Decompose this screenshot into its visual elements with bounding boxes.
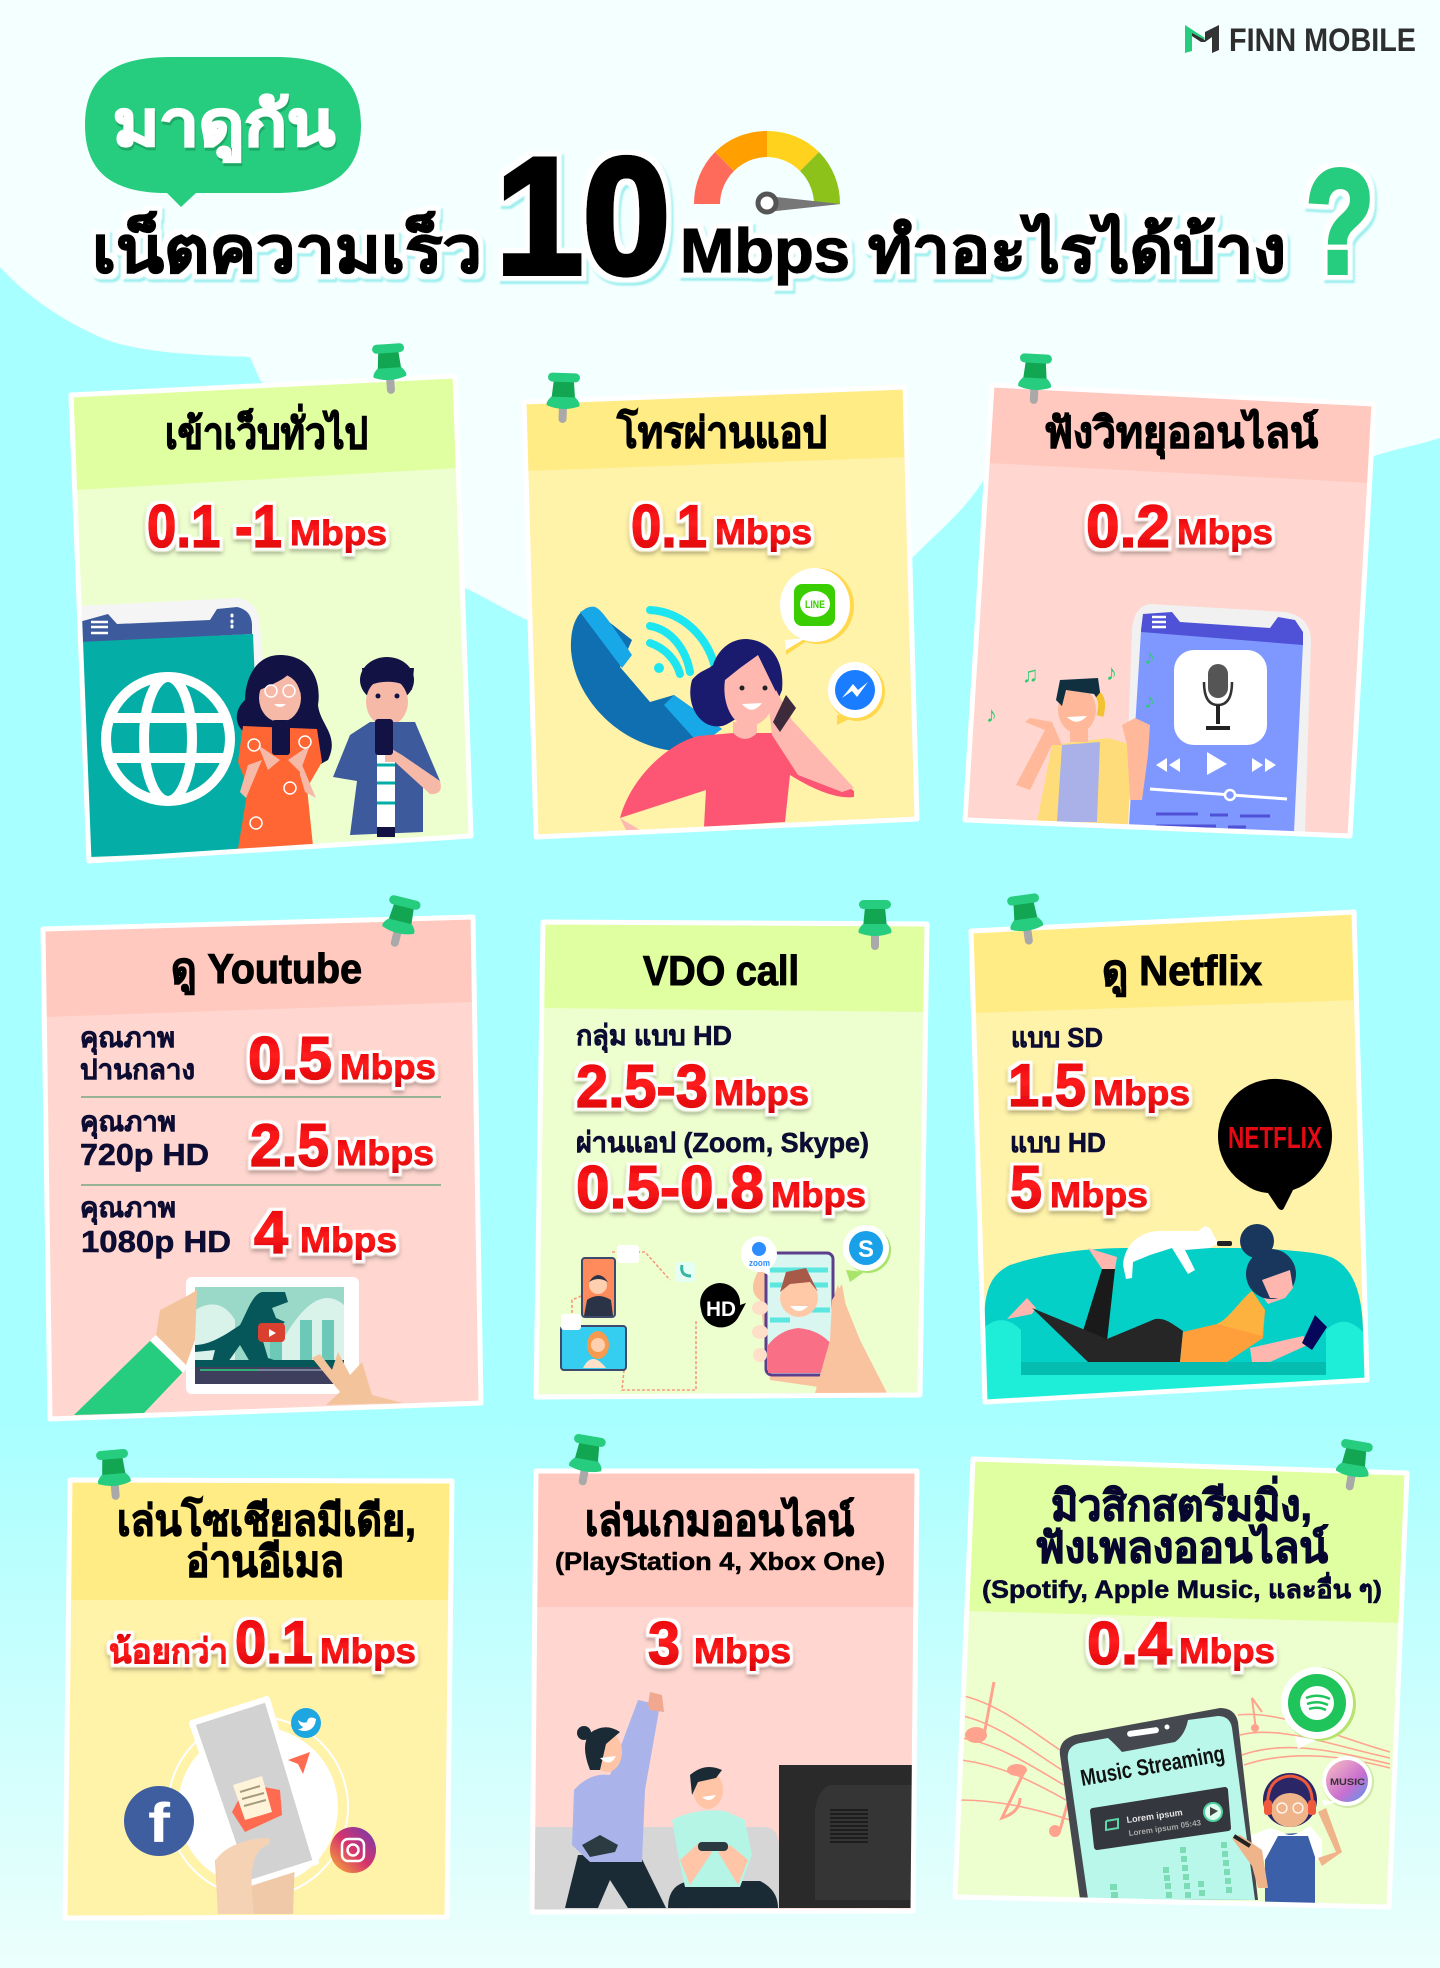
title: ทำอะไรได้บ้าง bbox=[868, 213, 1286, 286]
illustration: phone with social icons bbox=[124, 1699, 376, 1914]
row: medium quality: ปานกลาง bbox=[80, 1054, 195, 1085]
pin bbox=[1017, 353, 1053, 405]
panel: music streaming bbox=[955, 1438, 1407, 1907]
card border bbox=[524, 387, 917, 837]
pin bbox=[858, 900, 892, 950]
card border bbox=[71, 376, 471, 861]
illustration: woman calling with handset bbox=[571, 568, 885, 830]
card body bbox=[536, 922, 927, 1397]
card header band bbox=[535, 1471, 917, 1607]
title: 10 bbox=[496, 124, 670, 308]
speed value: Mbps bbox=[320, 1632, 416, 1671]
heading: ดู Netflix bbox=[1102, 947, 1263, 997]
card border bbox=[65, 1480, 452, 1918]
speed value: Mbps bbox=[1177, 513, 1273, 552]
card body bbox=[71, 376, 471, 861]
row: HD: Mbps bbox=[1050, 1176, 1148, 1215]
panel: youtube bbox=[43, 894, 481, 1419]
icon: speedometer gauge bbox=[694, 131, 841, 212]
speed value bbox=[109, 1609, 416, 1676]
panel: social media bbox=[65, 1449, 452, 1918]
heading: มิวสิกสตรีมมิ่ง, bbox=[1051, 1476, 1312, 1529]
heading: โทรผ่านแอป bbox=[616, 408, 827, 456]
speed value bbox=[1086, 493, 1273, 560]
netflix bubble bbox=[1218, 1079, 1332, 1210]
illustration: woman on couch with cat bbox=[984, 1224, 1366, 1401]
logo: FINN MOBILE: FINN MOBILE bbox=[1229, 22, 1416, 58]
illustration: video call phones: zoom bbox=[749, 1258, 770, 1268]
illustration: woman calling with handset: LINE bbox=[805, 599, 825, 611]
row: medium quality: 0.5 bbox=[248, 1025, 332, 1092]
row: group HD: 2.5-3 bbox=[576, 1053, 708, 1120]
card body bbox=[965, 385, 1374, 836]
speed value: 3 bbox=[648, 1610, 680, 1677]
heading: เล่นโซเชียลมีเดีย, bbox=[117, 1496, 416, 1544]
heading: อ่านอีเมล bbox=[186, 1538, 344, 1585]
background: pale top wave bbox=[0, 0, 1440, 631]
panel: online radio bbox=[965, 353, 1374, 836]
illustration: video call phones: HD bbox=[706, 1298, 736, 1321]
speed value bbox=[648, 1610, 791, 1677]
row: 1080p bbox=[80, 1192, 397, 1266]
card header band bbox=[71, 376, 458, 490]
heading: เข้าเว็บทั่วไป bbox=[165, 404, 368, 457]
row: via app: 0.5-0.8 bbox=[576, 1154, 764, 1221]
illustration: phone, music notes, girl: Music Streaming bbox=[1078, 1740, 1227, 1791]
illustration: video call phones: S bbox=[858, 1236, 874, 1263]
row: via app: ผ่านแอป (Zoom, Skype) bbox=[576, 1127, 869, 1158]
speed value: น้อยกว่า bbox=[109, 1633, 228, 1671]
panel: general web bbox=[71, 343, 471, 861]
row: group HD: Mbps bbox=[714, 1074, 809, 1113]
row: 720p: 2.5 bbox=[250, 1112, 329, 1179]
illustration: phone, music notes, girl: Lorem ipsum bbox=[1128, 1822, 1179, 1838]
title: Mbps bbox=[680, 217, 850, 286]
row: group HD: กลุ่ม แบบ HD bbox=[576, 1020, 732, 1053]
heading: (PlayStation 4, Xbox One) bbox=[555, 1548, 885, 1576]
row: 720p: Mbps bbox=[336, 1134, 434, 1173]
speech bubble: มาดูกัน bbox=[85, 57, 361, 207]
card border bbox=[536, 922, 927, 1397]
heading: เล่นเกมออนไลน์ bbox=[585, 1496, 854, 1544]
panel: video call bbox=[536, 900, 927, 1397]
row: 1080p: คุณภาพ bbox=[80, 1192, 176, 1225]
card header band bbox=[542, 922, 927, 1012]
card body bbox=[524, 387, 917, 837]
row: SD: Mbps bbox=[1093, 1074, 1190, 1113]
row: 720p: 720p HD bbox=[80, 1137, 209, 1172]
card border bbox=[965, 385, 1374, 836]
heading bbox=[117, 1496, 416, 1585]
row: SD bbox=[1008, 1022, 1190, 1119]
card border bbox=[955, 1459, 1407, 1907]
pin bbox=[1333, 1438, 1374, 1493]
card header band bbox=[68, 1480, 452, 1600]
card header band bbox=[43, 917, 475, 1017]
illustration: man listening and phone bbox=[986, 604, 1311, 832]
speed value: 0.4 bbox=[1087, 1610, 1173, 1677]
heading: (Spotify, Apple Music, และอื่น ๆ) bbox=[982, 1572, 1382, 1604]
pin bbox=[1006, 893, 1046, 947]
illustration: phone with social icons: f bbox=[148, 1791, 170, 1854]
row: 1080p: 1080p HD bbox=[81, 1224, 231, 1259]
heading bbox=[555, 1496, 885, 1576]
row: medium quality: Mbps bbox=[340, 1048, 436, 1087]
heading: VDO call bbox=[643, 947, 799, 994]
speed value bbox=[1087, 1610, 1275, 1677]
pin bbox=[566, 1433, 607, 1488]
panel: netflix bbox=[971, 893, 1367, 1402]
illustration: phone, music notes, girl bbox=[960, 1667, 1390, 1904]
row: SD: 1.5 bbox=[1008, 1052, 1086, 1119]
card body bbox=[955, 1459, 1407, 1907]
panel: voice call bbox=[524, 372, 917, 837]
question mark: ? bbox=[1306, 140, 1374, 303]
speed value: Mbps bbox=[715, 513, 812, 552]
pin bbox=[546, 372, 581, 424]
illustration: phone, music notes, girl: Lorem ipsum bbox=[1126, 1807, 1183, 1825]
illustration: man listening and phone: ♪ bbox=[986, 702, 997, 727]
row: 1080p: Mbps bbox=[300, 1221, 397, 1260]
speed value: 0.1 -1 bbox=[147, 493, 282, 560]
speed value: Mbps bbox=[694, 1632, 791, 1671]
card header band bbox=[967, 1459, 1407, 1623]
card body bbox=[971, 912, 1367, 1402]
row: medium quality: คุณภาพ bbox=[80, 1022, 175, 1055]
row: 720p: คุณภาพ bbox=[80, 1106, 176, 1139]
card body bbox=[532, 1471, 917, 1912]
title bbox=[92, 124, 1286, 308]
pin bbox=[378, 894, 422, 951]
title: เน็ตความเร็ว bbox=[92, 212, 482, 286]
netflix bubble: NETFLIX bbox=[1228, 1120, 1322, 1155]
illustration: video call phones bbox=[561, 1225, 891, 1393]
speed value: 0.1 bbox=[235, 1609, 313, 1676]
illustration: tablet video player bbox=[74, 1277, 403, 1415]
card body bbox=[43, 917, 481, 1419]
row: HD bbox=[1010, 1127, 1148, 1221]
pin bbox=[371, 343, 408, 395]
heading: ฟังวิทยุออนไลน์ bbox=[1044, 408, 1318, 459]
row: via app: Mbps bbox=[771, 1176, 866, 1215]
speed value: Mbps bbox=[290, 514, 387, 553]
illustration: man listening and phone: ♪ bbox=[1106, 660, 1117, 685]
illustration: gamers and TV bbox=[532, 1692, 913, 1910]
heading bbox=[982, 1476, 1382, 1604]
speed value: Mbps bbox=[1179, 1632, 1275, 1671]
row: HD: แบบ HD bbox=[1010, 1127, 1106, 1158]
card border bbox=[532, 1471, 917, 1912]
row: 720p bbox=[80, 1106, 434, 1179]
card header band bbox=[971, 912, 1357, 1013]
speech bubble: มาดูกัน: มาดูกัน bbox=[113, 90, 335, 162]
row: via app bbox=[576, 1127, 869, 1221]
illustration: phone with globe and two people bbox=[77, 598, 441, 858]
row: 1080p: 4 bbox=[254, 1199, 289, 1266]
speed value bbox=[631, 493, 812, 560]
card border bbox=[43, 917, 481, 1419]
card border bbox=[971, 912, 1367, 1402]
row: HD: 5 bbox=[1010, 1154, 1042, 1221]
row: medium quality bbox=[80, 1022, 436, 1092]
heading: ดู Youtube bbox=[171, 945, 362, 995]
speed value: 0.1 bbox=[631, 493, 707, 560]
speed value bbox=[147, 493, 387, 560]
illustration: man listening and phone: ♪ bbox=[1144, 644, 1155, 669]
card body bbox=[65, 1480, 452, 1918]
illustration: phone, music notes, girl: 05:43 bbox=[1180, 1818, 1202, 1830]
row: SD: แบบ SD bbox=[1011, 1022, 1103, 1053]
card header band bbox=[524, 387, 907, 471]
illustration: man listening and phone: ♫ bbox=[1022, 662, 1038, 687]
pin bbox=[95, 1449, 132, 1501]
speed value: 0.2 bbox=[1086, 493, 1170, 560]
illustration: man listening and phone: ♪ bbox=[1144, 688, 1155, 713]
card header band bbox=[988, 385, 1374, 483]
heading: ฟังเพลงออนไลน์ bbox=[1035, 1523, 1328, 1571]
row: group HD bbox=[576, 1020, 809, 1120]
panel: online games bbox=[532, 1433, 917, 1912]
illustration: phone, music notes, girl: MUSIC bbox=[1330, 1777, 1366, 1787]
